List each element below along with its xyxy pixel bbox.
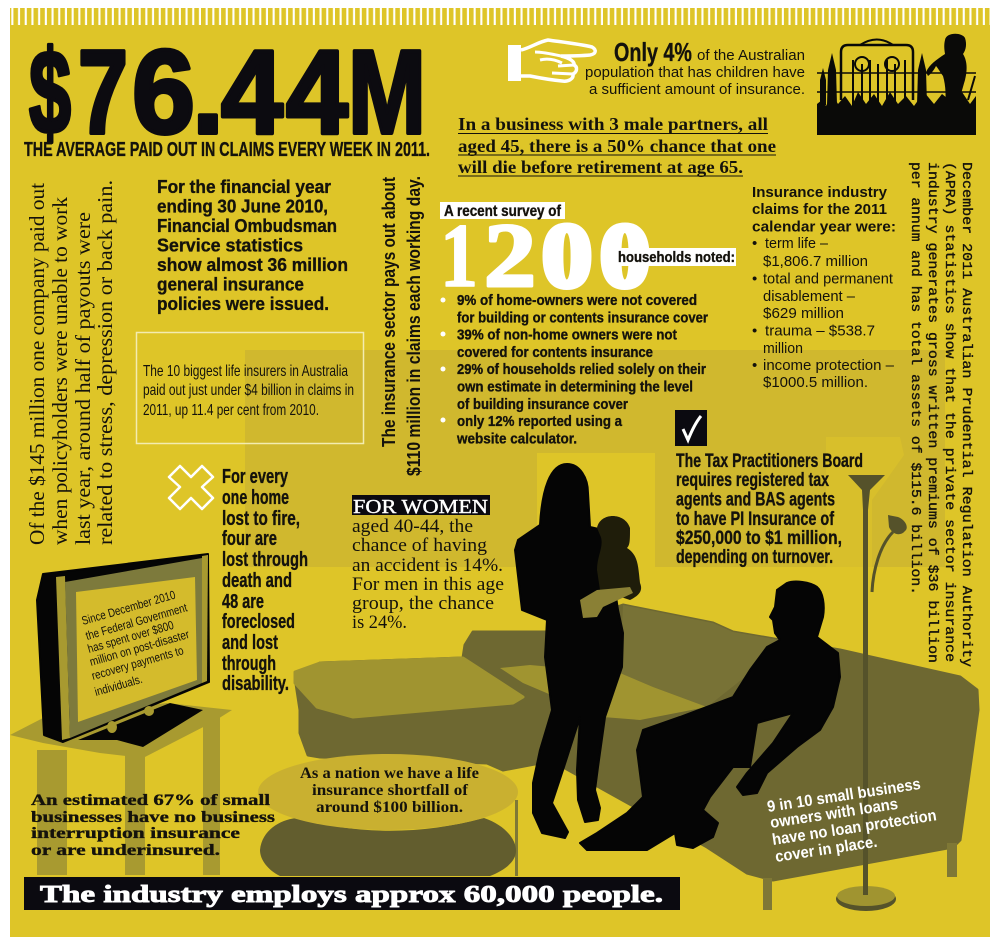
- survey bullet list: covered for contents insurance: [457, 344, 653, 361]
- text: APRA vertical: (APRA) statistics show that the private sector insurance: [941, 162, 957, 662]
- text: tax practitioners: [676, 451, 863, 568]
- text: industry claims list: •: [752, 322, 757, 340]
- text: for women: aged 40-44, the: [352, 516, 473, 537]
- illustration: woman with baby: [515, 464, 641, 838]
- text: 9 in 10 small business: cover in place.: [774, 834, 878, 866]
- text: only 4 percent: Only 4%: [614, 37, 692, 67]
- text: 9 in 10 small business: [766, 776, 938, 866]
- text: 67 percent of small businesses: [31, 792, 275, 859]
- text: industry claims list: disablement –: [763, 288, 856, 305]
- text: television screen: individuals.: [93, 672, 144, 699]
- text: financial ombudsman: Financial Ombudsman: [157, 216, 337, 236]
- text: 9 in 10 small business: have no loan protection: [771, 807, 938, 849]
- text: male partners: aged 45, there is a 50% chance that one: [458, 136, 776, 156]
- illustration: floor lamp: [836, 475, 907, 911]
- text: 145 million vertical: last year, around half of payouts were: [71, 212, 95, 545]
- text: television screen: the Federal Government: [84, 600, 189, 643]
- text: tax practitioners: agents and BAS agents: [676, 490, 835, 510]
- big figure: .: [192, 26, 224, 159]
- text: financial ombudsman: For the financial year: [157, 177, 331, 197]
- text: home lost to fire: lost through: [222, 549, 308, 571]
- survey bullet list: for building or contents insurance cover: [457, 309, 708, 326]
- big figure: $: [29, 26, 71, 159]
- text: financial ombudsman: [157, 177, 348, 314]
- text: male partners: will die before retirement at age 65.: [458, 157, 743, 177]
- text: life insurance shortfall: around $100 billion.: [316, 799, 463, 816]
- text: only 4 percent: population that has children have: [585, 64, 805, 81]
- text: for women: is 24%.: [352, 612, 407, 633]
- text: television screen: [80, 588, 191, 699]
- text: only 4 percent: [585, 37, 805, 98]
- text: tax practitioners: The Tax Practitioners Board: [676, 451, 863, 472]
- text: industry claims list: term life –: [765, 235, 829, 252]
- text: industry claims list: •: [752, 235, 757, 252]
- icon: fence and child silhouette: [817, 34, 976, 135]
- big figure: 6: [132, 26, 195, 159]
- survey bullet list: only 12% reported using a: [457, 413, 623, 430]
- callout: biggest life insurers: [136, 332, 364, 444]
- survey bullet list: 39% of non-home owners were not: [457, 327, 677, 344]
- text: industry claims list: [752, 184, 896, 391]
- text: financial ombudsman: show almost 36 million: [157, 255, 348, 275]
- text: home lost to fire: For every: [222, 466, 289, 488]
- text: home lost to fire: disability.: [222, 673, 289, 695]
- text: home lost to fire: four are: [222, 528, 277, 550]
- illustration: seated man: [580, 582, 840, 850]
- big number 1200: 0: [600, 205, 650, 306]
- big figure: 7: [78, 26, 128, 159]
- text: industry claims list: $629 million: [763, 305, 844, 322]
- banner: industry employs: The industry employs approx 60,000 people.: [40, 882, 663, 908]
- big figure caption: THE AVERAGE PAID OUT IN CLAIMS EVERY WEEK IN 2011.: [24, 139, 430, 161]
- text: industry claims list: income protection –: [763, 357, 895, 374]
- text: 67 percent of small businesses: or are underinsured.: [31, 842, 220, 859]
- big figure: 4: [286, 26, 348, 159]
- survey bullet list: website calculator.: [456, 430, 577, 447]
- text: male partners: In a business with 3 male partners, all: [458, 114, 768, 134]
- survey bullet list: 9% of home-owners were not covered: [457, 292, 697, 309]
- text: industry claims list: claims for the 2011: [752, 201, 887, 218]
- text: life insurance shortfall: As a nation we have a life: [300, 765, 479, 782]
- text: 145 million vertical: Of the $145 million one company paid out: [25, 183, 49, 545]
- illustration: coffee table: [258, 754, 518, 876]
- text: for women: an accident is 14%.: [352, 555, 503, 576]
- text: financial ombudsman: policies were issued.: [157, 294, 329, 314]
- text: insurance sector vertical: [379, 176, 424, 476]
- illustration: television: [37, 554, 209, 747]
- text: home lost to fire: through: [222, 653, 276, 675]
- text: 145 million vertical: when policyholders were unable to work: [48, 197, 72, 545]
- text: male partners: [458, 114, 776, 177]
- text: for women: FOR WOMEN: [353, 496, 488, 518]
- text: industry claims list: •: [752, 270, 757, 288]
- text: tax practitioners: requires registered tax: [676, 470, 829, 491]
- banner: industry employs: [24, 877, 680, 910]
- illustration: side table: [10, 703, 232, 875]
- text: tax practitioners: depending on turnover.: [676, 547, 833, 568]
- text: survey label: A recent survey of: [444, 203, 562, 220]
- text: television screen: million on post-disaster: [88, 627, 191, 669]
- text: households noted: households noted:: [618, 249, 735, 266]
- text: for women: group, the chance: [352, 593, 494, 614]
- survey bullet list: of building insurance cover: [457, 396, 628, 413]
- big number 1200: 0: [542, 205, 592, 306]
- text: television screen: recovery payments to: [90, 643, 185, 683]
- big figure: [29, 26, 426, 159]
- text: APRA vertical: industry generates gross written premiums of $36 billion: [924, 162, 940, 663]
- text: home lost to fire: and lost: [222, 632, 278, 654]
- text: industry claims list: million: [763, 340, 803, 357]
- text: tax practitioners: $250,000 to $1 million,: [676, 528, 842, 549]
- text: home lost to fire: death and: [222, 570, 292, 592]
- big number 1200: 2: [484, 205, 536, 306]
- text: industry claims list: calendar year were:: [752, 218, 896, 236]
- callout: biggest life insurers: paid out just under $4 billion in claims in: [143, 382, 354, 399]
- big number 1200: [440, 205, 650, 306]
- big number 1200: 1: [440, 205, 478, 306]
- text: for women: For men in this age: [352, 574, 504, 595]
- survey bullet list: own estimate in determining the level: [457, 378, 693, 396]
- text: home lost to fire: one home: [222, 487, 289, 509]
- text: only 4 percent: of the Australian: [697, 47, 805, 64]
- icon: check box: [675, 410, 707, 446]
- text: 67 percent of small businesses: businesses have no business: [31, 809, 275, 826]
- text: insurance sector vertical: $110 million in claims each working day.: [404, 176, 424, 476]
- text: industry claims list: Insurance industry: [752, 184, 888, 201]
- text: for women: chance of having: [352, 535, 488, 556]
- text: financial ombudsman: ending 30 June 2010,: [157, 196, 328, 216]
- text: APRA vertical: per annum and has total assets of $115.6 billion.: [907, 162, 923, 595]
- icon: pointing hand: [508, 40, 595, 81]
- text: home lost to fire: lost to fire,: [222, 508, 300, 530]
- text: financial ombudsman: general insurance: [157, 274, 304, 294]
- callout: biggest life insurers: The 10 biggest life insurers in Australia: [143, 363, 348, 380]
- text: home lost to fire: foreclosed: [222, 611, 295, 633]
- text: 67 percent of small businesses: interruption insurance: [31, 825, 240, 842]
- text: industry claims list: total and permanent: [763, 270, 894, 288]
- text: 9 in 10 small business: 9 in 10 small business: [766, 776, 922, 816]
- text: industry claims list: $1000.5 million.: [763, 374, 868, 391]
- icon: cross: [169, 466, 213, 509]
- text: for women: [352, 495, 504, 633]
- text: APRA vertical: [907, 162, 974, 667]
- survey bullet list: 29% of households relied solely on their: [457, 361, 706, 378]
- text: industry claims list: •: [752, 357, 757, 374]
- text: home lost to fire: 48 are: [222, 591, 264, 613]
- text: life insurance shortfall: insurance shortfall of: [312, 782, 469, 799]
- survey bullet list: [440, 292, 708, 447]
- text: television screen: has spent over $800: [86, 618, 176, 656]
- text: industry claims list: trauma – $538.7: [765, 322, 875, 340]
- text: industry claims list: $1,806.7 million: [763, 253, 868, 270]
- text: 145 million vertical: related to stress, depression or back pain.: [93, 180, 117, 545]
- text: only 4 percent: a sufficient amount of insurance.: [589, 81, 805, 98]
- text: 9 in 10 small business: owners with loans: [769, 796, 899, 832]
- text: insurance sector vertical: The insurance sector pays out about: [379, 177, 399, 447]
- big figure: 4: [221, 26, 283, 159]
- big figure: M: [348, 26, 426, 159]
- text: life insurance shortfall: [300, 765, 479, 816]
- text: tax practitioners: to have PI Insurance of: [676, 509, 835, 530]
- text: APRA vertical: December 2011 Australian Prudential Regulation Authority: [958, 162, 974, 667]
- text: television screen: Since December 2010: [80, 588, 177, 628]
- text: financial ombudsman: Service statistics: [157, 236, 303, 256]
- text: 145 million vertical: [25, 180, 117, 545]
- callout: biggest life insurers: 2011, up 11.4 per cent from 2010.: [143, 402, 319, 419]
- text: home lost to fire: [222, 466, 308, 695]
- text: 67 percent of small businesses: An estimated 67% of small: [31, 792, 271, 809]
- illustration: sofa: [295, 605, 978, 910]
